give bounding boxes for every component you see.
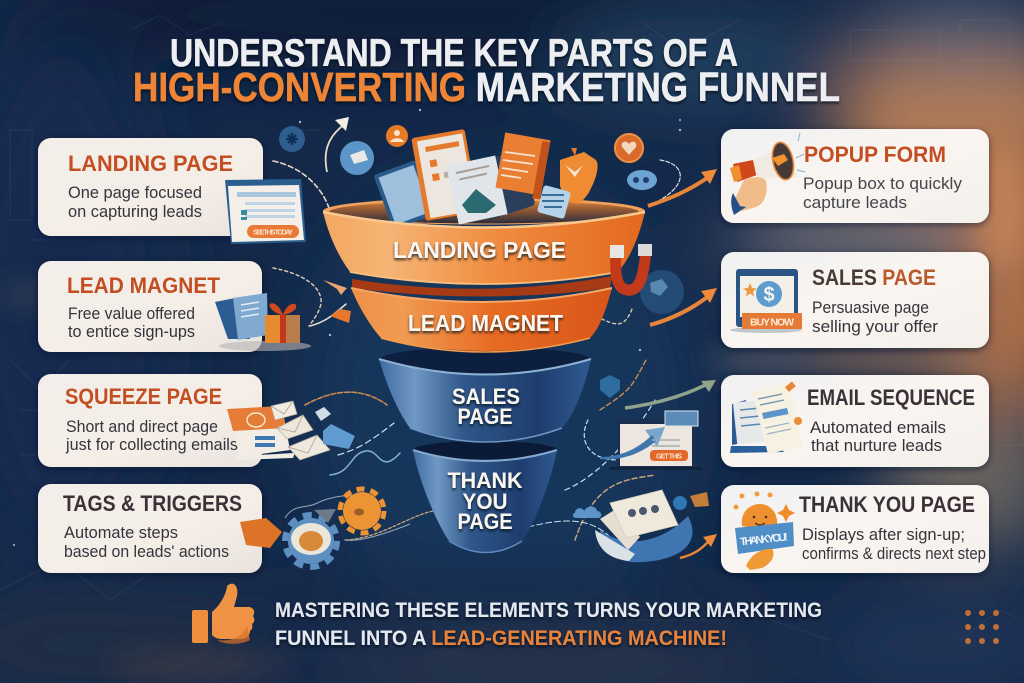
arrow: to email sequence — [625, 380, 716, 408]
panel: email sequence — [721, 375, 989, 467]
icon: mail globe — [340, 141, 374, 175]
funnel tier: lead magnet — [351, 276, 612, 352]
heading: TAGS & TRIGGERS — [63, 491, 242, 516]
funnel tier: sales page: SALES — [452, 384, 520, 409]
description: Short and direct page — [66, 418, 218, 436]
floating documents — [373, 129, 598, 230]
description: Automate steps — [64, 524, 178, 542]
closing message: FUNNEL INTO A LEAD-GENERATING MACHINE! — [275, 627, 727, 650]
decorative dot grid — [965, 610, 999, 644]
icon: cloud — [573, 506, 601, 518]
icon: envelopes and form — [227, 401, 355, 460]
closing message — [275, 599, 822, 650]
marketing funnel — [323, 129, 645, 552]
arrow: to popup form — [648, 169, 717, 206]
heading: SQUEEZE PAGE — [65, 384, 222, 409]
funnel tier: lead magnet: LEAD MAGNET — [408, 310, 563, 336]
icon: shield — [600, 375, 620, 398]
icon: web page window — [225, 179, 306, 244]
funnel tier: thank you page — [413, 441, 557, 552]
icon: thumbs up — [192, 584, 254, 644]
description: Free value offered — [68, 305, 195, 323]
icon: smiley with thank you sign — [734, 492, 795, 570]
icon: swoosh arrow — [326, 117, 349, 172]
icon: smiley with thank you sign: THANK YOU! — [739, 531, 788, 548]
panel: popup form: capture leads — [803, 194, 907, 212]
icon: paper plane — [323, 280, 347, 295]
funnel tier: thank you page: PAGE — [458, 509, 512, 534]
heading: SALES PAGE — [812, 265, 936, 290]
description: Persuasive page — [812, 299, 929, 317]
right side arrows — [625, 169, 717, 558]
funnel tier: sales page — [379, 347, 591, 442]
panel: popup form — [721, 129, 989, 223]
heading: THANK YOU PAGE — [799, 492, 975, 517]
description: Displays after sign-up; — [802, 526, 965, 544]
icon: browser with buy now: BUY NOW — [750, 316, 794, 328]
heading: LANDING PAGE — [68, 151, 233, 176]
heading: LEAD MAGNET — [67, 273, 221, 298]
panel: lead magnet — [38, 261, 311, 352]
panel: landing page — [38, 138, 306, 244]
panel: email sequence: that nurture leads — [811, 437, 942, 455]
icon: browser with buy now: $ — [763, 284, 775, 306]
panel: squeeze page — [38, 374, 355, 467]
icon: horseshoe magnet — [610, 244, 652, 290]
icon: laptop with cursor arrow: GET THIS — [656, 454, 682, 460]
closing message: MASTERING THESE ELEMENTS TURNS YOUR MARKETING — [275, 599, 822, 622]
panel: squeeze page: just for collecting emails — [65, 436, 238, 454]
icon: gear badge — [279, 126, 305, 152]
connector curves — [273, 160, 680, 547]
icon: web page window: SEE THIS TODAY — [253, 230, 293, 236]
icon: email documents — [730, 381, 802, 454]
icon: laptop with cursor arrow — [600, 411, 702, 470]
description: Popup box to quickly — [803, 175, 963, 193]
funnel back rim — [323, 198, 645, 224]
icon: ebook and gift — [215, 293, 311, 351]
panel: sales page: selling your offer — [812, 318, 939, 336]
panel: lead magnet: to entice sign-ups — [68, 323, 195, 341]
heading: EMAIL SEQUENCE — [807, 385, 975, 410]
icon: gears and tag — [240, 489, 410, 567]
description: One page focused — [68, 184, 202, 202]
icon: orange arrow — [330, 309, 351, 323]
funnel tier: thank you page: THANK — [448, 468, 523, 493]
icon: user badge — [386, 125, 408, 147]
panel: tags and triggers — [38, 484, 410, 573]
funnel tier: landing page — [323, 212, 645, 284]
title: UNDERSTAND THE KEY PARTS OF A — [170, 32, 738, 75]
icon: chat bubble — [627, 170, 657, 190]
title — [133, 32, 840, 110]
panel: thank you page: confirms & directs next step — [802, 545, 986, 563]
panel: landing page: on capturing leads — [68, 203, 202, 221]
icon: browser with buy now — [730, 269, 802, 333]
title: HIGH-CONVERTING MARKETING FUNNEL — [133, 64, 840, 110]
funnel tier: landing page: LANDING PAGE — [393, 237, 566, 263]
icon: megaphone in hand — [730, 133, 805, 215]
icon: chat cards and envelope — [595, 490, 709, 562]
funnel tier: thank you page: YOU — [462, 489, 508, 514]
panel: thank you page — [721, 485, 989, 573]
description: Automated emails — [810, 419, 946, 437]
arrow: to sales page — [650, 288, 717, 325]
arrow: to thank you page — [680, 534, 717, 558]
funnel tier: sales page: PAGE — [458, 404, 512, 429]
icon: globe — [640, 270, 684, 314]
funnel interior — [329, 200, 639, 224]
icon: heart badge — [615, 134, 643, 162]
floating social icons — [279, 117, 684, 518]
panel: tags and triggers: based on leads' actions — [64, 543, 229, 561]
heading: POPUP FORM — [804, 142, 946, 167]
panel: sales page — [721, 252, 989, 348]
